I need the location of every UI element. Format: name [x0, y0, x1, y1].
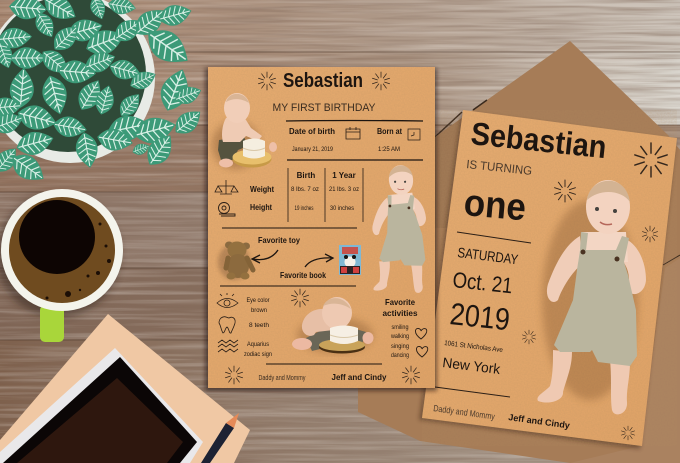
parents handwriting: Daddy and Mommy	[433, 403, 496, 422]
plant leaves	[0, 0, 206, 188]
cake	[330, 326, 358, 344]
photo: standing baby	[361, 163, 434, 298]
icon: tooth	[219, 317, 235, 333]
saturday: SATURDAY	[457, 244, 520, 267]
pencil	[201, 413, 239, 463]
arrow to book	[305, 254, 333, 267]
envelope flap edge	[435, 100, 487, 137]
weight row: 21 lbs. 3 oz	[329, 187, 359, 193]
date of birth: Date of birth	[289, 127, 335, 136]
birth time: 1:25 AM	[378, 146, 400, 153]
cake board	[319, 340, 365, 354]
table lines	[288, 168, 363, 222]
eye color text: Eye color	[246, 297, 270, 304]
divider	[220, 285, 356, 287]
favorite activities heading: Favorite	[385, 297, 415, 307]
weight row: Weight	[250, 185, 274, 194]
favorite activities heading: activities	[382, 308, 418, 318]
coffee cup	[0, 189, 123, 342]
weight row: 8 lbs. 7 oz	[291, 187, 319, 193]
favorite book label: Favorite book	[280, 270, 326, 280]
cake board	[232, 150, 272, 168]
invitation name: Sebastian	[469, 115, 608, 165]
eye color text	[246, 297, 270, 314]
board paper	[208, 67, 435, 388]
table head: 1 Year	[332, 171, 356, 180]
teeth text: 8 teeth	[249, 322, 269, 329]
baby shadow	[542, 200, 638, 400]
card: birthday invitation	[419, 110, 677, 449]
activities list: singing	[391, 343, 409, 350]
zodiac text: zodiac sign	[244, 351, 272, 358]
divider	[287, 159, 423, 161]
trousers	[218, 137, 248, 160]
footer suns	[225, 366, 420, 384]
table head: Birth	[297, 171, 315, 180]
address: 1061 St Nicholas Ave	[444, 340, 503, 354]
born at: Born at	[377, 127, 402, 136]
icon: tape measure	[218, 202, 235, 216]
cup shadow	[0, 193, 120, 317]
photo: standing baby large	[537, 180, 646, 414]
footer names: Jeff and Cindy	[332, 373, 387, 382]
is turning: IS TURNING	[466, 157, 533, 178]
plant pot	[0, 0, 155, 163]
cup handle	[40, 305, 64, 342]
board shadow	[205, 68, 437, 391]
cup rim	[1, 189, 123, 311]
divider	[457, 232, 531, 243]
divider	[435, 387, 510, 397]
heading suns	[258, 72, 390, 90]
heading: name: Sebastian	[283, 70, 363, 92]
notebook paper	[0, 314, 250, 463]
favorite toy label: Favorite toy	[258, 235, 300, 245]
feet	[219, 158, 233, 168]
suns	[522, 143, 667, 440]
arrow to toy	[252, 250, 278, 263]
arm and body	[302, 309, 340, 336]
head	[322, 297, 352, 329]
height row: 30 inches	[330, 206, 354, 212]
potted plant	[0, 0, 206, 188]
shorts	[306, 326, 336, 351]
footer parents: Daddy and Mommy	[258, 373, 306, 382]
height row	[250, 203, 354, 212]
icon: clock box	[408, 129, 420, 140]
icon: aquarius waves	[218, 340, 238, 352]
coffee crema	[9, 197, 115, 303]
date: Oct. 21	[451, 267, 514, 298]
divider	[222, 227, 357, 229]
city: New York	[442, 354, 502, 377]
photo: baby with cake	[212, 93, 277, 169]
photo: baby face in cake	[292, 297, 374, 354]
envelope right fold	[663, 255, 680, 265]
crema bubbles	[46, 222, 111, 300]
height row: 19 inches	[294, 206, 314, 212]
zodiac text	[244, 341, 272, 358]
card: first birthday board	[205, 67, 437, 391]
envelope	[358, 41, 680, 463]
feet	[292, 338, 312, 350]
photo: panda book	[339, 245, 361, 275]
invitation paper	[422, 110, 677, 446]
birth date: January 21, 2019	[292, 146, 333, 153]
activities list: walking	[390, 333, 409, 340]
invitation shadow	[419, 112, 676, 449]
tablet	[0, 348, 203, 463]
head	[224, 93, 250, 123]
activities list: smiling	[392, 324, 409, 331]
icon: calendar	[346, 127, 360, 139]
divider	[286, 120, 423, 122]
icon: eye	[217, 293, 238, 308]
eye color text: brown	[251, 307, 267, 314]
divider	[266, 363, 382, 365]
envelope left panel	[435, 118, 462, 228]
dark coffee	[19, 200, 95, 274]
year: 2019	[448, 296, 512, 337]
icon: scale	[215, 180, 238, 194]
parents names: Jeff and Cindy	[508, 412, 571, 431]
icon: hearts	[415, 328, 428, 357]
weight row	[250, 185, 359, 194]
sun	[291, 289, 309, 307]
activities list: dancing	[391, 352, 409, 359]
favorite activities heading	[382, 297, 418, 318]
activities list	[390, 324, 409, 359]
subtitle: MY FIRST BIRTHDAY	[272, 102, 376, 114]
photo: teddy bear	[218, 242, 253, 280]
cake	[243, 138, 265, 158]
zodiac text: Aquarius	[247, 341, 270, 348]
height row: Height	[250, 203, 272, 212]
body	[222, 115, 262, 142]
table head	[297, 171, 356, 180]
one: one	[462, 182, 528, 229]
